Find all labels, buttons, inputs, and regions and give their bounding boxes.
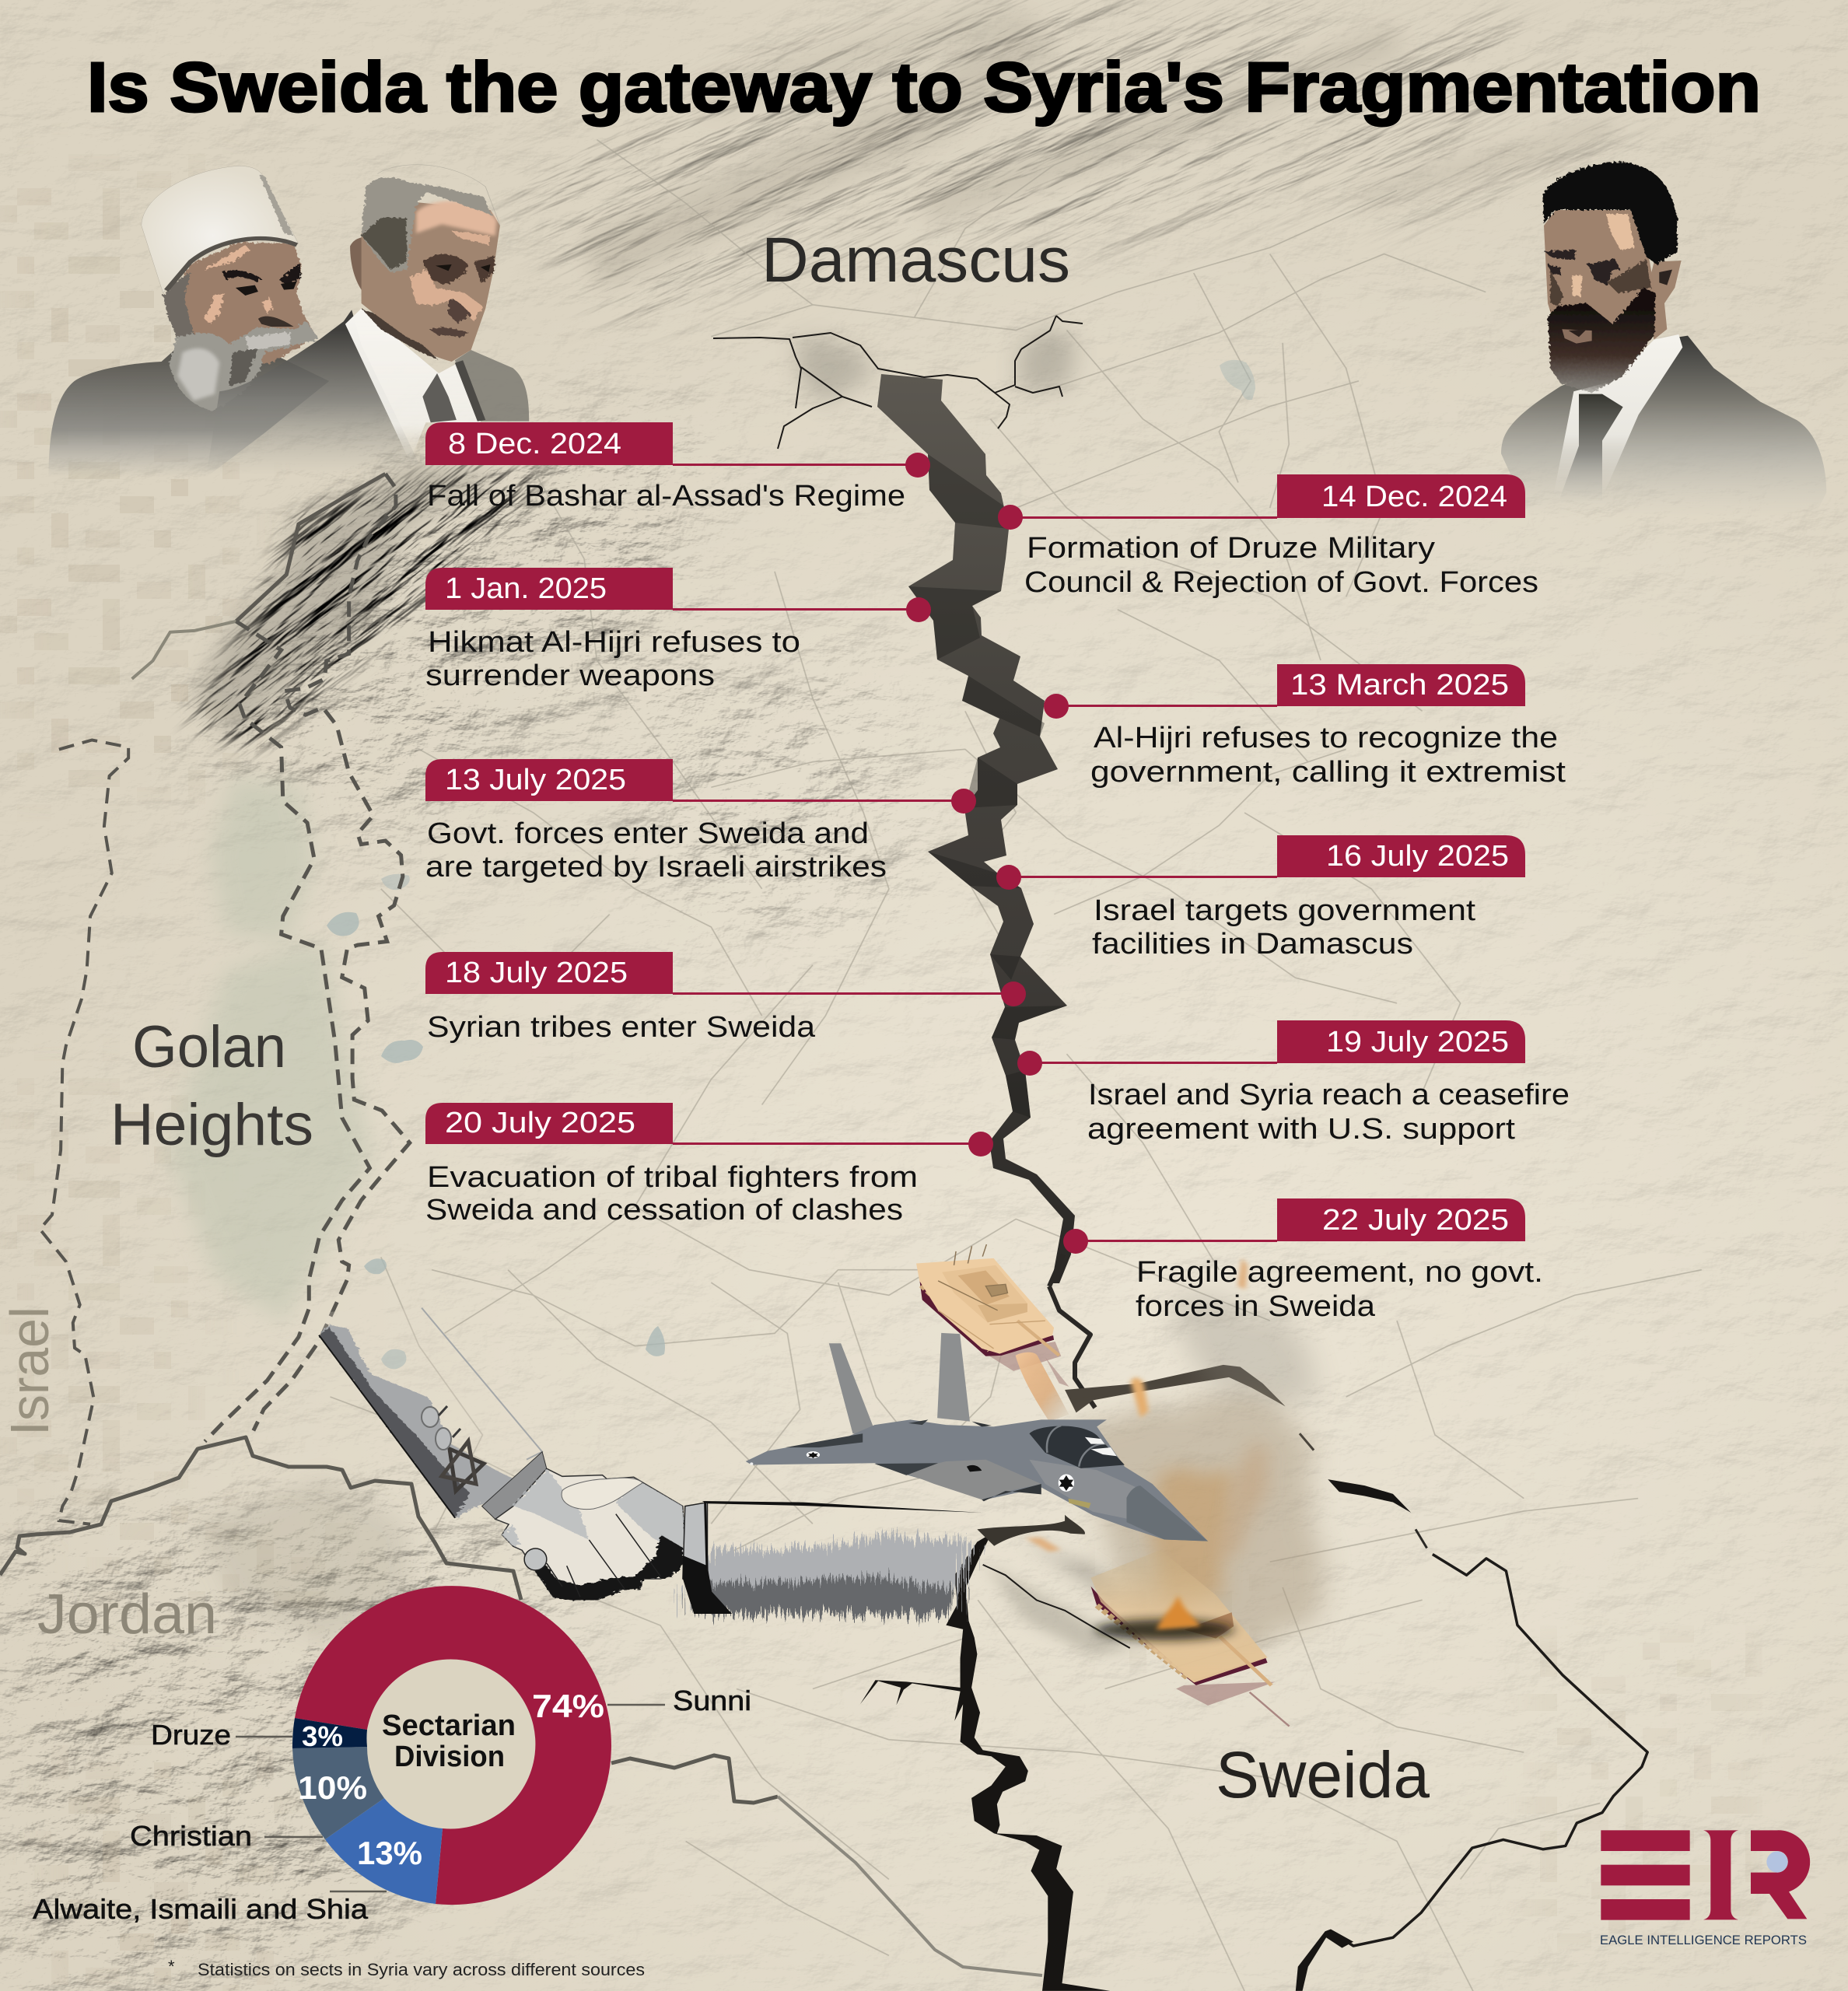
- event: 8 Dec. 2024: 8 Dec. 2024: [448, 428, 621, 460]
- portrait: netanyahu: [207, 165, 529, 474]
- event: 13 July 2025: Govt. forces enter Sweida and: [427, 817, 869, 850]
- jordan border fading: [778, 1797, 1042, 1975]
- portrait: sheikh: [48, 166, 329, 477]
- portrait: syrian president: [1501, 162, 1826, 516]
- label: golan heights: [110, 1014, 313, 1158]
- footnote: Statistics on sects in Syria vary across different sources: [198, 1960, 645, 1979]
- event: 1 Jan. 2025: surrender weapons: [425, 660, 715, 692]
- footnote: *: [168, 1957, 175, 1976]
- label: israel: Israel: [0, 1307, 60, 1436]
- event: 20 July 2025: Evacuation of tribal fighters from: [427, 1161, 918, 1194]
- label: sweida: Sweida: [1216, 1738, 1430, 1811]
- dashed borders: [40, 474, 410, 1524]
- event: 1 Jan. 2025: [425, 568, 931, 692]
- solid border lebanon: [236, 474, 386, 621]
- donut centre title: Division: [394, 1741, 505, 1773]
- roads: [331, 127, 1702, 1991]
- lebanon range shading: [194, 467, 498, 1641]
- event: 1 Jan. 2025: 1 Jan. 2025: [445, 572, 607, 605]
- donut values: 10%: [298, 1769, 367, 1806]
- tank: upper: [916, 1244, 1069, 1422]
- event: 20 July 2025: Sweida and cessation of clashes: [425, 1194, 903, 1226]
- event: 16 July 2025: 16 July 2025: [1326, 840, 1509, 873]
- segment: alawite ismaili shia 13%: [325, 1798, 443, 1904]
- event: 19 July 2025: 19 July 2025: [1326, 1026, 1509, 1058]
- donut legend labels: Christian: [130, 1820, 252, 1852]
- donut values: [298, 1688, 604, 1871]
- event: 22 July 2025: [1063, 1198, 1543, 1323]
- logo: eagle intelligence reports: EAGLE INTELLIGENCE REPORTS: [1600, 1933, 1807, 1947]
- event: 13 March 2025: Al-Hijri refuses to recognize the: [1094, 722, 1558, 754]
- event: 22 July 2025: Fragile agreement, no govt.: [1136, 1256, 1543, 1289]
- donut leader lines: [236, 1705, 665, 1891]
- icon: star of david: [442, 1441, 484, 1491]
- crack: main fissure: [877, 374, 1095, 1408]
- donut chart: sectarian division: [33, 1586, 751, 1925]
- hand clasp: [495, 1468, 685, 1600]
- event: 18 July 2025: Syrian tribes enter Sweida: [427, 1011, 816, 1044]
- label: golan heights: Golan: [132, 1014, 286, 1080]
- jordan border: [0, 1437, 778, 1803]
- right sleeve: [683, 1501, 982, 1615]
- event: 8 Dec. 2024: Fall of Bashar al-Assad's Regime: [427, 480, 905, 513]
- event: 22 July 2025: forces in Sweida: [1136, 1290, 1376, 1323]
- handshake: [319, 1308, 982, 1615]
- event: 13 July 2025: are targeted by Israeli airstrikes: [425, 851, 887, 884]
- event: 20 July 2025: [425, 1103, 993, 1226]
- timeline: right events: [996, 474, 1570, 1323]
- lakes: [327, 360, 1255, 1369]
- event: 16 July 2025: facilities in Damascus: [1092, 928, 1413, 961]
- event: 19 July 2025: agreement with U.S. support: [1087, 1113, 1515, 1146]
- event: 16 July 2025: Israel targets government: [1094, 894, 1475, 927]
- donut legend labels: Druze: [151, 1719, 231, 1751]
- donut values: 3%: [302, 1720, 343, 1752]
- event: 14 Dec. 2024: Formation of Druze Military: [1027, 532, 1435, 565]
- event: 13 July 2025: [425, 759, 976, 884]
- event: 1 Jan. 2025: Hikmat Al-Hijri refuses to: [428, 626, 800, 659]
- lebanon range streaks: [176, 461, 551, 761]
- smoke and explosion: [1029, 1296, 1319, 1643]
- segment: christian 10%: [292, 1747, 384, 1839]
- donut values: 13%: [357, 1835, 422, 1871]
- event: 18 July 2025: 18 July 2025: [445, 957, 628, 989]
- event: 19 July 2025: [1017, 1020, 1570, 1146]
- title: Is Sweida the gateway to Syria's Fragmentation: [87, 49, 1761, 127]
- flame streaks: [1025, 1258, 1248, 1552]
- segment: druze 3%: [292, 1718, 367, 1748]
- segment: sunni 74%: [295, 1586, 611, 1905]
- donut centre title: Sectarian: [382, 1709, 516, 1742]
- event: 14 Dec. 2024: 14 Dec. 2024: [1321, 481, 1507, 513]
- donut centre title: [382, 1709, 516, 1773]
- event: 16 July 2025: [996, 835, 1525, 961]
- donut legend labels: Alwaite, Ismaili and Shia: [33, 1893, 369, 1925]
- fading border: [132, 621, 236, 679]
- logo: eagle intelligence reports: [1600, 1830, 1810, 1947]
- tank: burning: [1091, 1550, 1290, 1727]
- fighter jet: [746, 1333, 1208, 1541]
- donut values: 74%: [532, 1688, 604, 1724]
- label: golan heights: Heights: [110, 1092, 313, 1158]
- timeline: left events: [425, 422, 1026, 1226]
- label: damascus: Damascus: [761, 225, 1070, 296]
- event: 19 July 2025: Israel and Syria reach a ceasefire: [1088, 1079, 1570, 1111]
- crack: damascus hairline cracks: [713, 316, 1083, 449]
- icon: uniform medals: [422, 1406, 460, 1450]
- donut legend labels: [33, 1685, 751, 1925]
- event: 13 July 2025: 13 July 2025: [445, 764, 626, 796]
- event: 22 July 2025: 22 July 2025: [1322, 1204, 1509, 1237]
- event: 20 July 2025: 20 July 2025: [445, 1107, 635, 1139]
- event: 13 March 2025: government, calling it extremist: [1090, 756, 1566, 789]
- crack: lower fissure and sweida border: [860, 1365, 1647, 1991]
- event: 8 Dec. 2024: [425, 422, 930, 513]
- event: 18 July 2025: [425, 952, 1026, 1044]
- event: 14 Dec. 2024: [998, 474, 1538, 599]
- golan tinted area: [167, 778, 373, 1322]
- donut legend labels: Sunni: [673, 1685, 751, 1716]
- event: 13 March 2025: [1044, 664, 1566, 789]
- left sleeve: [319, 1308, 547, 1519]
- label: jordan: Jordan: [37, 1583, 217, 1646]
- event: 13 March 2025: 13 March 2025: [1290, 669, 1509, 702]
- event: 14 Dec. 2024: Council & Rejection of Govt. Forces: [1024, 566, 1538, 599]
